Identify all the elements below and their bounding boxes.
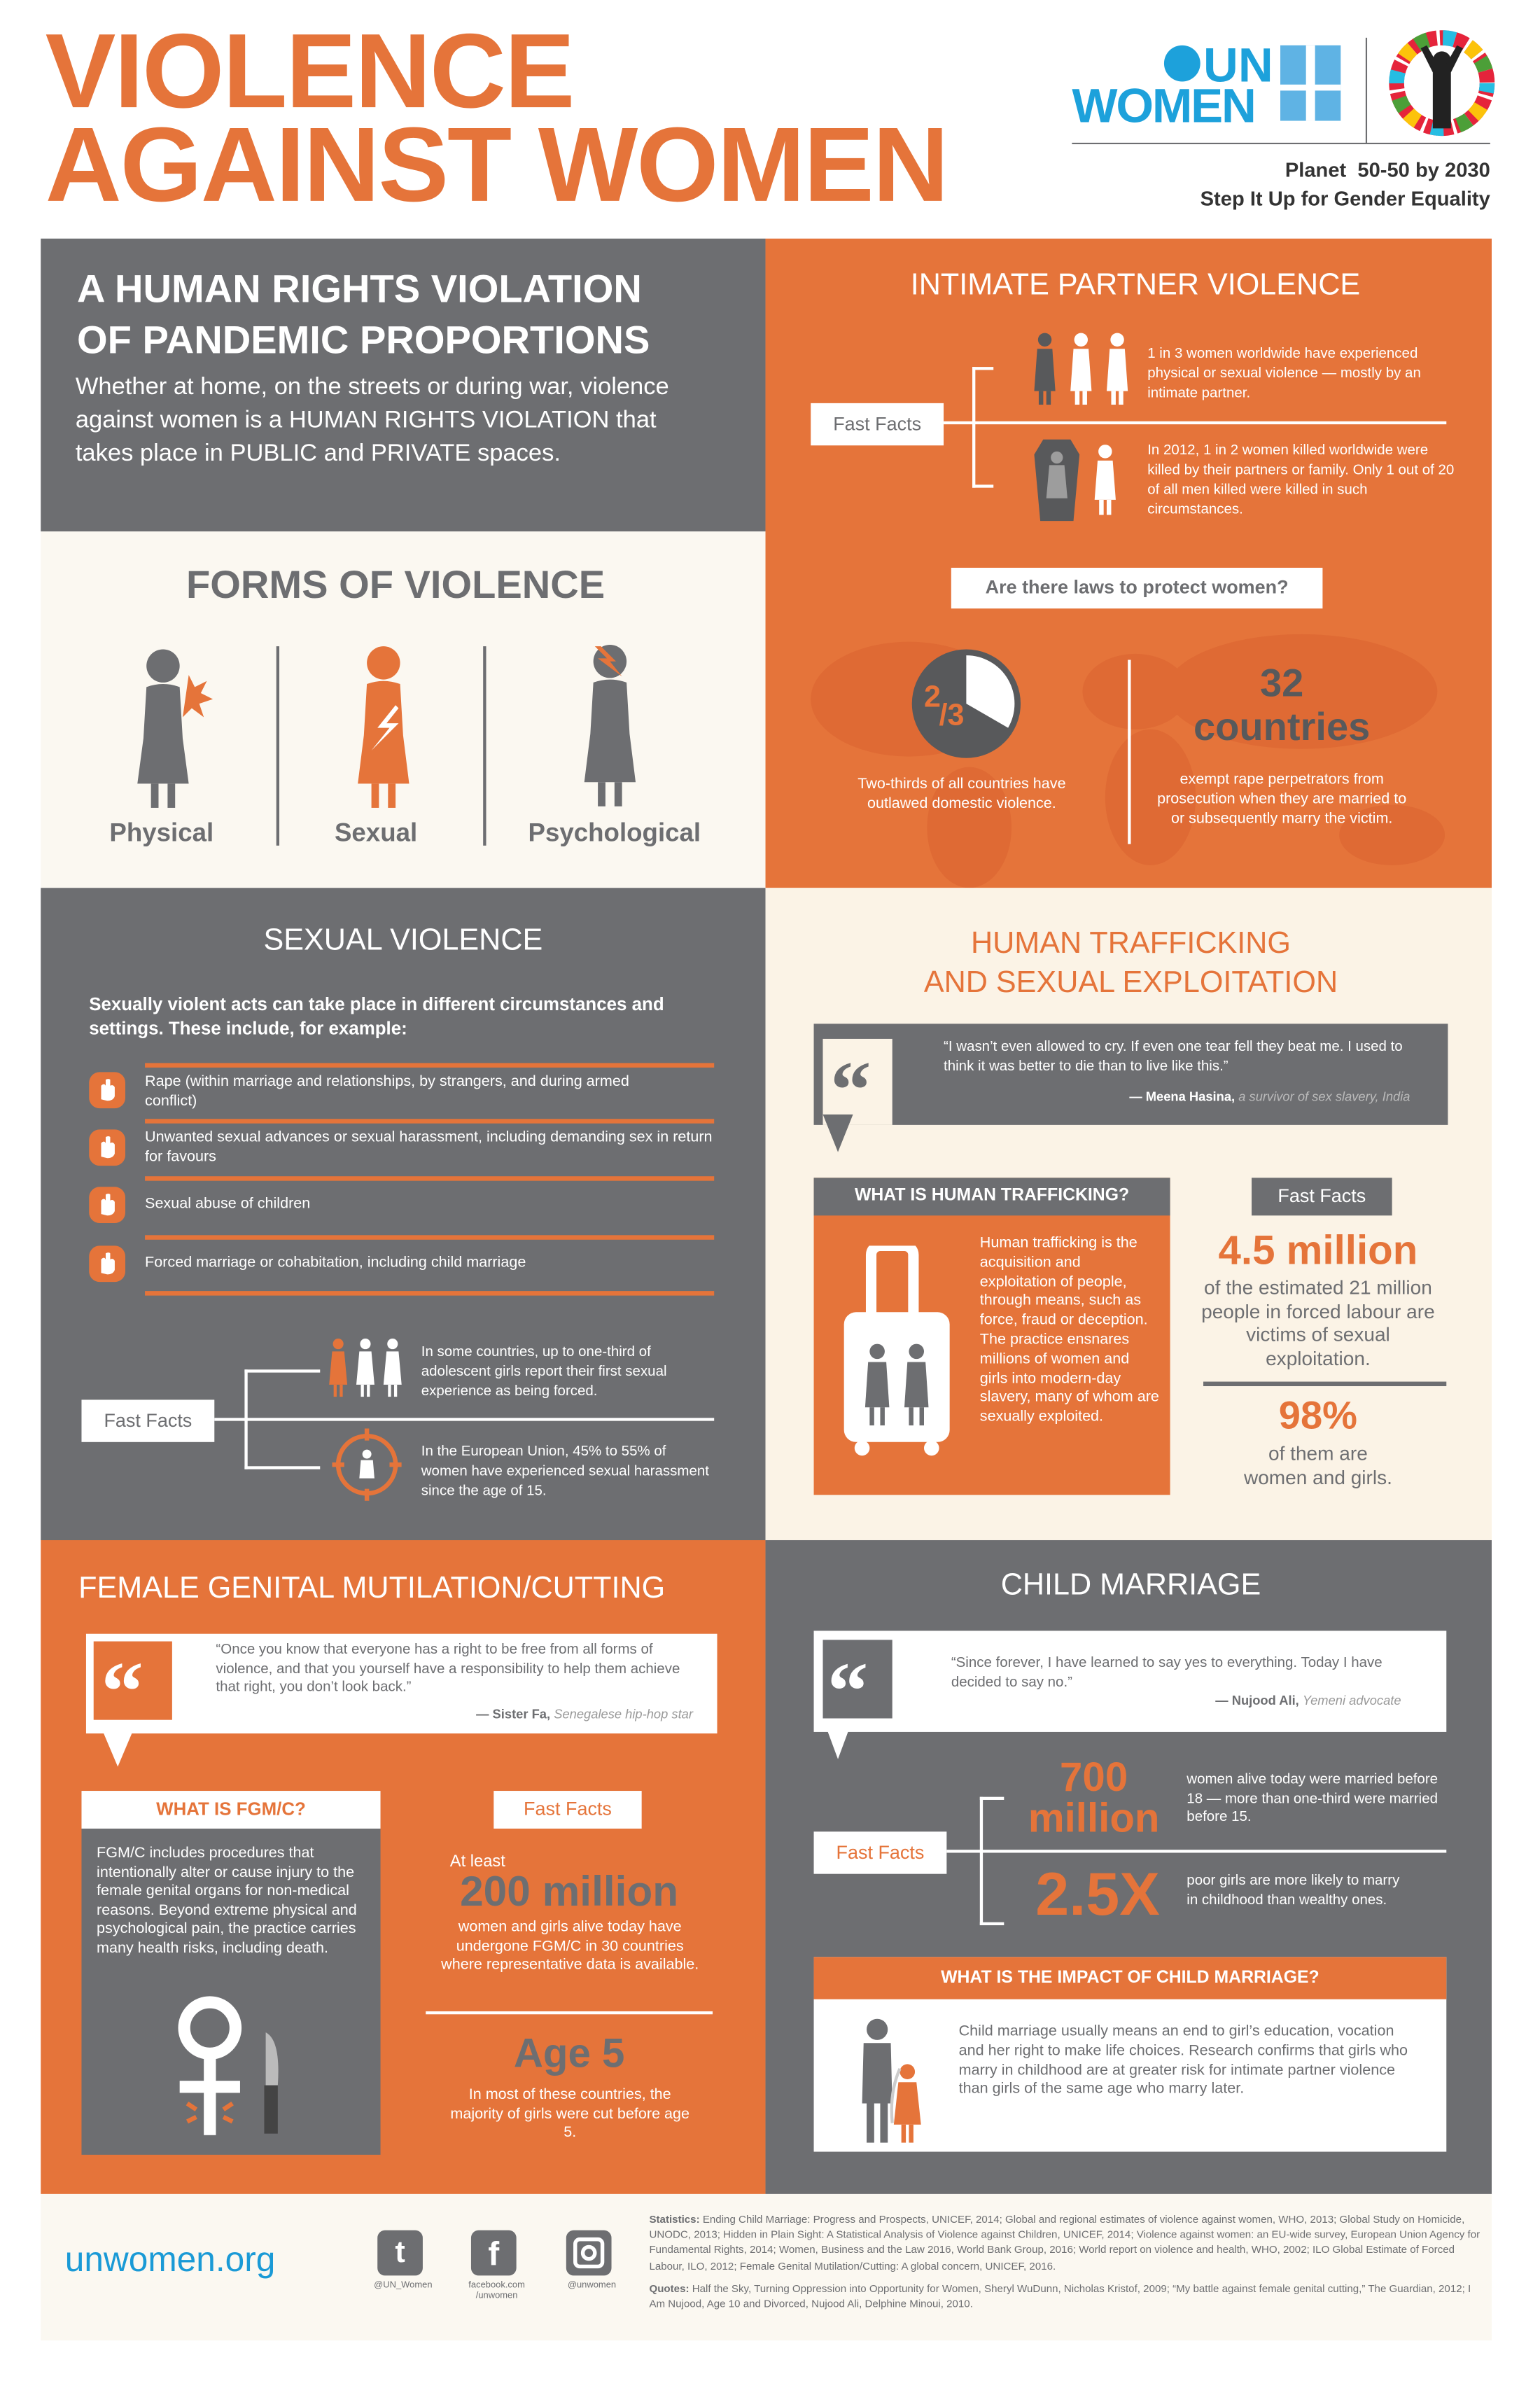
- panel: intimate partner violence: 1 in 3 women worldwide have experienced physical or sexual violence — mostly by an intimate partner.: [1147, 346, 1421, 402]
- fast facts label: Fast Facts: [1278, 1185, 1366, 1206]
- quote: Nujood Ali: [813, 1631, 1446, 1759]
- fast facts label: [814, 1831, 946, 1874]
- panel: sexual violence: In the European Union, 45% to 55% of women have experienced sexual harassment since the age of 15.: [421, 1444, 709, 1500]
- panel: intimate partner violence: Two-thirds of all countries have outlawed domestic violence.: [858, 776, 1066, 812]
- logo: UN Women: Step It Up for Gender Equality: [1200, 187, 1490, 210]
- panel: human trafficking: women and girls.: [1244, 1466, 1392, 1489]
- box: impact of child marriage: WHAT IS THE IMPACT OF CHILD MARRIAGE?: [941, 1969, 1320, 1987]
- panel: sexual violence: SEXUAL VIOLENCE: [263, 924, 542, 957]
- panel: human rights intro: Whether at home, on the streets or during war, violence against women is a HUMAN RIGHTS VIOLATION that takes place in PUBLIC and PRIVATE spaces.: [76, 375, 669, 466]
- list: forms of sexual violence: [89, 1072, 713, 1283]
- icon: twitter: @UN_Women: [374, 2282, 433, 2291]
- fast facts label: Fast Facts: [833, 414, 921, 435]
- box: what is FGM/C: FGM/C includes procedures that intentionally alter or cause injury to the female genital organs for non-medical reasons. Beyond extreme physical and psychological pain, the practice carries many health risks, including death.: [97, 1845, 357, 1956]
- box: impact of child marriage: Child marriage usually means an end to girl’s education, vocation and her right to make life choices. Research confirms that girls who marry in childhood are at greater risk for intimate partner violence than girls of the same age who marry later.: [959, 2023, 1408, 2098]
- website: unwomen.org: [65, 2240, 275, 2279]
- panel: forms of violence: [41, 531, 766, 888]
- quote: Sister Fa: [85, 1634, 717, 1767]
- logo: UN Women: [1072, 30, 1495, 210]
- stat: 4.5 million: 4.5 million: [1219, 1228, 1418, 1273]
- icon: 1 in 3 women: [1035, 333, 1128, 405]
- panel: child marriage: women alive today were married before 18 — more than one-third were married before 15.: [1186, 1771, 1438, 1826]
- panel: human rights intro: OF PANDEMIC PROPORTIONS: [77, 317, 650, 363]
- quote: Nujood Ali: “Since forever, I have learned to say yes to everything. Today I have decided to say no.”: [951, 1655, 1382, 1691]
- stat: 700 million: million: [1028, 1796, 1159, 1841]
- icon: psychological: [584, 645, 636, 807]
- icon: facebook: facebook.com: [468, 2282, 525, 2291]
- quote: Nujood Ali: — Nujood Ali, Yemeni advocate: [1215, 1693, 1401, 1708]
- pie chart: two thirds: 2: [924, 680, 941, 713]
- panel: sexual violence: In some countries, up to one-third of adolescent girls report their first sexual experience as being forced.: [421, 1344, 667, 1399]
- panel: human trafficking: HUMAN TRAFFICKING: [971, 927, 1291, 961]
- fast facts label: [81, 1399, 214, 1442]
- list: forms of sexual violence: Rape (within marriage and relationships, by strangers, and during armed conflict): [145, 1074, 629, 1110]
- panel: intimate partner violence: INTIMATE PARTNER VIOLENCE: [911, 269, 1360, 302]
- icon: sexual: [358, 646, 409, 808]
- panel: human trafficking: of them are: [1268, 1442, 1368, 1465]
- icon: venus and blade: [178, 1996, 279, 2135]
- stat: 98%: 98%: [1279, 1392, 1357, 1437]
- logo: UN Women: UN: [1203, 38, 1273, 92]
- icon: facebook: /unwomen: [476, 2292, 517, 2301]
- icon: instagram: [566, 2230, 616, 2291]
- stat: 32 countries: countries: [1194, 704, 1370, 749]
- pie chart: two thirds: [911, 650, 1021, 758]
- icon: target: [332, 1428, 402, 1501]
- icon: instagram: @unwomen: [568, 2282, 616, 2291]
- panel: forms of violence: FORMS OF VIOLENCE: [186, 561, 605, 607]
- stat: 200 million: At least: [450, 1852, 505, 1871]
- panel: child marriage: [766, 1540, 1492, 2194]
- panel: forms of violence: Sexual: [335, 818, 417, 847]
- question box: [951, 568, 1322, 608]
- pie chart: two thirds: /3: [939, 698, 965, 732]
- panel: FGM/C: FEMALE GENITAL MUTILATION/CUTTING: [78, 1572, 665, 1605]
- panel: FGM/C: 200 million: [460, 1868, 678, 1915]
- icon: twitter: [374, 2230, 433, 2291]
- stat: 700 million: [1028, 1754, 1159, 1841]
- box: what is human trafficking: Human trafficking is the acquisition and exploitation of people, through means, such as force, fraud or deception. The practice ensnares millions of women and girls into modern-day slavery, many of whom are sexually exploited.: [980, 1235, 1159, 1425]
- logo: UN Women: Planet 50-50 by 2030: [1285, 158, 1490, 181]
- panel: human trafficking: AND SEXUAL EXPLOITATION: [924, 966, 1338, 1000]
- icon: twitter: t: [395, 2236, 405, 2270]
- panel: child marriage: CHILD MARRIAGE: [1001, 1569, 1261, 1602]
- fast facts label: Fast Facts: [104, 1411, 192, 1432]
- panel: human rights intro: [41, 239, 766, 531]
- box: what is FGM/C: [81, 1791, 381, 2155]
- box: what is human trafficking: [814, 1178, 1170, 1495]
- list: forms of sexual violence: Forced marriage or cohabitation, including child marriage: [145, 1255, 526, 1271]
- quote: Meena Hasina: “I wasn’t even allowed to cry. If even one tear fell they beat me. I used to think it was better to die than to live like this.”: [944, 1039, 1403, 1075]
- panel: human rights intro: A HUMAN RIGHTS VIOLATION: [77, 266, 642, 311]
- quote: Meena Hasina: — Meena Hasina, a survivor of sex slavery, India: [1129, 1089, 1410, 1104]
- list: forms of sexual violence: Sexual abuse of children: [145, 1196, 310, 1213]
- quote: Sister Fa: — Sister Fa, Senegalese hip-hop star: [476, 1706, 693, 1722]
- panel: sexual violence: [41, 888, 766, 1540]
- fast facts label: Fast Facts: [524, 1799, 612, 1820]
- footer: [41, 2194, 1492, 2340]
- box: impact of child marriage: [814, 1957, 1446, 2152]
- icon: physical: [137, 650, 213, 808]
- panel: FGM/C: In most of these countries, the majority of girls were cut before age 5.: [450, 2087, 690, 2141]
- fast facts label: [811, 403, 944, 445]
- fast facts label: [1252, 1178, 1392, 1215]
- panel: human trafficking: of the estimated 21 million people in forced labour are victims of sexual exploitation.: [1201, 1276, 1435, 1369]
- stat: 32 countries: [1194, 660, 1370, 749]
- panel: intimate partner violence: exempt rape perpetrators from prosecution when they are married to or subsequently marry the victim.: [1157, 771, 1406, 828]
- panel: forms of violence: Psychological: [528, 818, 701, 847]
- stat: 2.5X: 2.5X: [1035, 1862, 1160, 1928]
- panel: human trafficking: [766, 888, 1492, 1540]
- stat: 32 countries: 32: [1260, 660, 1303, 705]
- logo: UN Women: WOMEN: [1072, 79, 1255, 133]
- panel: forms of violence: Physical: [109, 818, 214, 847]
- fast facts label: Fast Facts: [836, 1842, 924, 1864]
- icon: three girls: [329, 1339, 402, 1397]
- icon: man and child bride: [862, 2019, 921, 2143]
- panel: FGM/C: [41, 1540, 766, 2194]
- world map background: [811, 634, 1445, 888]
- icon: suitcase: [844, 1245, 950, 1456]
- panel: intimate partner violence: [766, 239, 1492, 888]
- icon: facebook: f: [488, 2235, 499, 2272]
- title: AGAINST WOMEN: [46, 106, 947, 223]
- panel: sexual violence: Sexually violent acts can take place in different circumstances and settings. These include, for example:: [89, 993, 664, 1039]
- stat: age 5: Age 5: [514, 2031, 624, 2076]
- panel: intimate partner violence: In 2012, 1 in 2 women killed worldwide were killed by their partners or family. Only 1 out of 20 of all men killed were killed in such circumstances.: [1147, 442, 1454, 518]
- stat: 700 million: 700: [1060, 1754, 1128, 1800]
- box: what is human trafficking: WHAT IS HUMAN TRAFFICKING?: [855, 1187, 1129, 1205]
- title: VIOLENCE: [46, 12, 573, 130]
- question box: Are there laws to protect women?: [986, 577, 1289, 598]
- quote: Meena Hasina: [813, 1024, 1448, 1152]
- panel: FGM/C: women and girls alive today have undergone FGM/C in 30 countries where representative data is available.: [441, 1919, 699, 1974]
- list: forms of sexual violence: Unwanted sexual advances or sexual harassment, including demanding sex in return for favours: [145, 1129, 713, 1166]
- quote: Sister Fa: “Once you know that everyone has a right to be free from all forms of violence, and that you yourself have a responsibility to help them achieve that right, you don’t look back.”: [216, 1642, 680, 1696]
- box: what is FGM/C: WHAT IS FGM/C?: [156, 1799, 306, 1820]
- fast facts label: [493, 1791, 642, 1829]
- sources text: Statistics: Ending Child Marriage: Progress and Prospects, UNICEF, 2014; Global and regional estimates of violence against women, WHO, 2013; Global Study on Homicide, UNODC, 2013; Hidden in Plain Sight: A Statistical Analysis of Violence against Children, UNICEF, 2014; Violence against women: an EU-wide survey, European Union Agency for Fundamental Rights, 2014; Women, Business and the Law 2016, World Bank Group, 2016; World report on violence and health, WHO, 2002; ILO Global Estimate of Forced Labour, ILO, 2012; Female Genital Mutilation/Cutting: A global concern, UNICEF, 2016. Quotes: Half the Sky, Turning Oppression into Opportunity for Women, Sheryl WuDunn, Nicholas Kristof, 2009; “My battle against female genital cutting,” The Guardian, 2012; I Am Nujood, Age 10 and Divorced, Nujood Ali, Delphine Minoui, 2010.: [649, 2215, 1480, 2310]
- icon: coffin: [1035, 440, 1116, 521]
- icon: facebook: [468, 2230, 525, 2301]
- title: [46, 12, 947, 223]
- panel: child marriage: poor girls are more likely to marry in childhood than wealthy ones.: [1186, 1873, 1399, 1908]
